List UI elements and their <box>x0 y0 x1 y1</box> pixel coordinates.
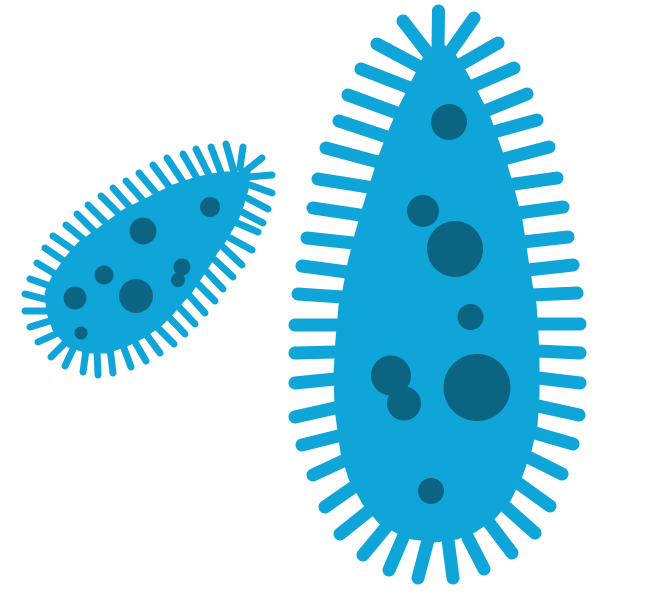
small organelles <box>64 197 220 340</box>
large cilia <box>295 11 580 578</box>
small body <box>45 172 250 353</box>
large organelles <box>371 104 510 504</box>
small paramecium <box>25 144 272 375</box>
large body <box>334 42 539 542</box>
small cilia <box>25 144 272 375</box>
large paramecium <box>295 11 580 578</box>
